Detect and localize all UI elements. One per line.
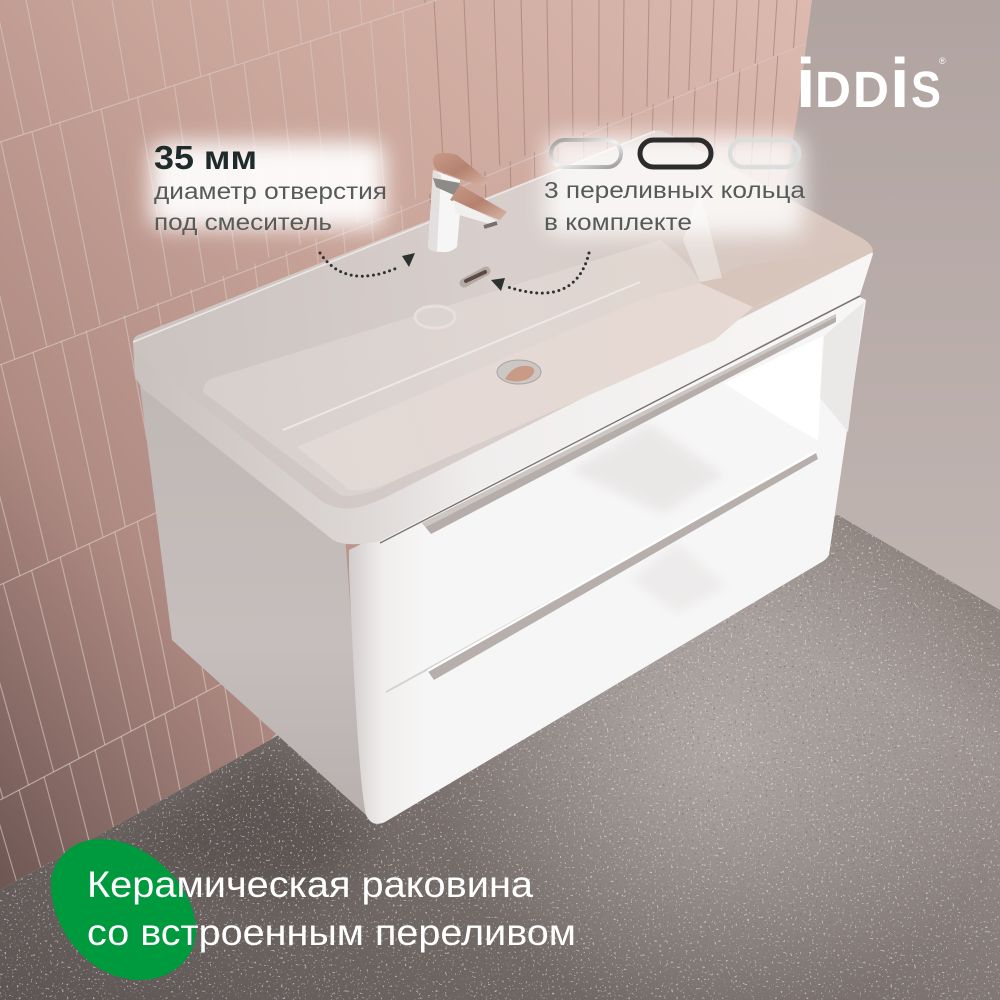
raised flat deck xyxy=(203,240,753,496)
logo: i xyxy=(890,44,909,122)
inner basin xyxy=(297,283,753,490)
faucet body xyxy=(428,170,460,252)
spout xyxy=(450,185,507,220)
ring: chrome xyxy=(551,140,621,167)
callout: rings xyxy=(544,177,805,235)
faucet collar xyxy=(433,178,460,197)
green blob xyxy=(51,839,196,980)
glow behind left callout xyxy=(150,142,385,228)
callout value: 35 мм xyxy=(154,139,257,176)
logo xyxy=(796,44,946,122)
callout: 35 mm xyxy=(154,139,387,235)
ceramic sink xyxy=(133,130,873,544)
logo: ® xyxy=(939,56,946,66)
rim shadow line xyxy=(380,296,860,543)
callout: 35 mm: под смеситель xyxy=(154,209,332,235)
ghost pop-up button xyxy=(415,306,455,328)
logo: i xyxy=(796,44,815,122)
floor xyxy=(0,500,1000,1000)
bottom handle xyxy=(427,453,818,680)
tiled wall xyxy=(0,0,820,900)
title xyxy=(87,864,576,953)
glow behind right callout xyxy=(545,135,803,235)
overflow rings xyxy=(551,140,799,167)
drain xyxy=(497,360,541,384)
right basin wing xyxy=(700,250,868,307)
vanity cabinet xyxy=(140,297,866,824)
step highlight xyxy=(283,282,640,430)
sink lip xyxy=(133,247,873,544)
ring: black xyxy=(640,140,711,167)
top handle xyxy=(422,314,836,534)
callout description: диаметр отверстия xyxy=(154,178,387,204)
faucet xyxy=(428,153,507,252)
fin reflection xyxy=(683,190,722,282)
dotted arrow: overflow ring xyxy=(491,253,589,293)
title: Керамическая раковина xyxy=(87,864,533,905)
handle xyxy=(433,153,490,186)
logo: D xyxy=(815,61,851,118)
sink top surface xyxy=(133,130,873,509)
title: со встроенным переливом xyxy=(87,912,576,953)
callout: rings: в комплекте xyxy=(544,209,692,235)
ring: white xyxy=(730,140,799,167)
logo: S xyxy=(911,61,941,118)
logo: D xyxy=(853,61,889,118)
cabinet side xyxy=(140,386,366,815)
dotted arrow: mixer hole xyxy=(320,253,415,276)
cabinet front xyxy=(349,297,866,824)
overflow slot xyxy=(464,271,486,283)
callout: rings: 3 переливных кольца xyxy=(544,177,805,203)
